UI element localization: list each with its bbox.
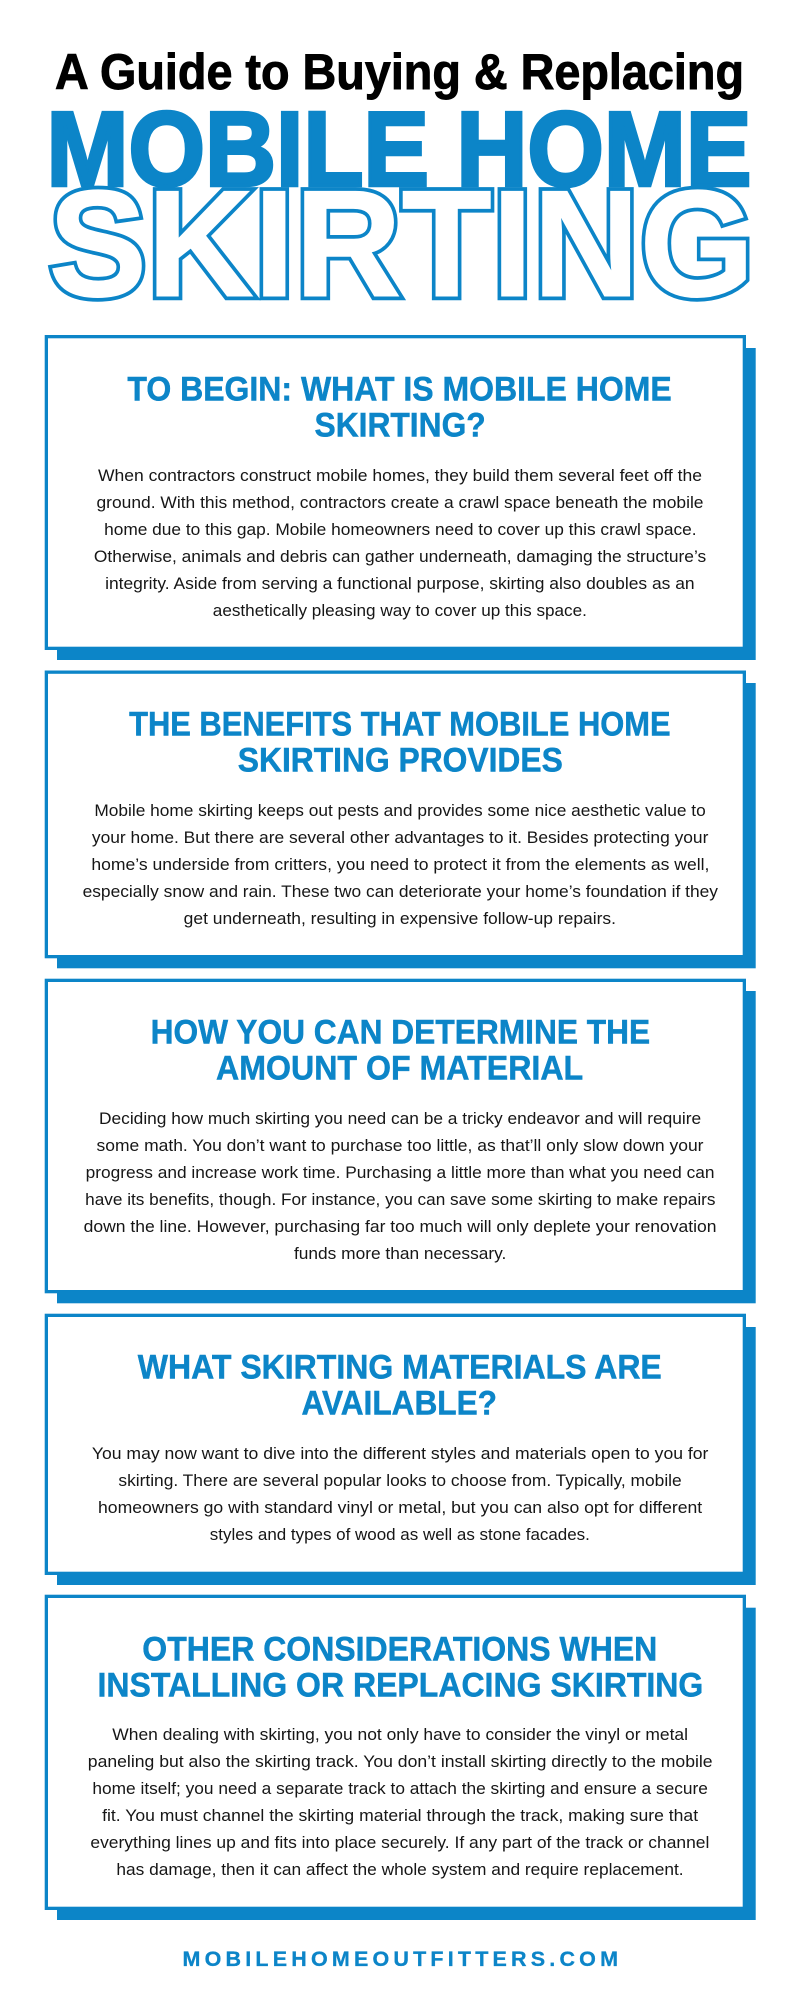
body text: You may now want to dive into the different styles and materials open to you for [92,1444,709,1463]
body text: home due to this gap. Mobile homeowners need to cover up this crawl space. [104,520,697,539]
heading [129,705,671,779]
body text: home itself; you need a separate track to attach the skirting and ensure a secure [92,1779,708,1798]
panel: available skirting materials [46,1315,756,1585]
body text [83,801,719,928]
heading: TO BEGIN: WHAT IS MOBILE HOME [127,370,672,408]
panel: other considerations [46,1596,756,1920]
panel: what is mobile home skirting [46,337,756,660]
body text: When contractors construct mobile homes, they build them several feet off the [98,466,702,485]
body text: integrity. Aside from serving a functional purpose, skirting also doubles as an [105,574,695,593]
body text: paneling but also the skirting track. You don’t install skirting directly to the mobile [88,1752,713,1771]
body text: home’s underside from critters, you need to protect it from the elements as well, [91,855,709,874]
body text: homeowners go with standard vinyl or metal, but you can also opt for different [98,1498,703,1517]
heading: INSTALLING OR REPLACING SKIRTING [98,1666,703,1704]
heading: AMOUNT OF MATERIAL [216,1049,583,1087]
body text: have its benefits, though. For instance, you can save some skirting to make repairs [85,1190,715,1209]
footer url: MOBILEHOMEOUTFITTERS.COM [182,1947,618,1971]
title line: Skirting outlined: SKIRTING [48,159,754,329]
body text: progress and increase work time. Purchasing a little more than what you need can [86,1163,715,1182]
body text: Deciding how much skirting you need can be a tricky endeavor and will require [99,1109,701,1128]
title line: A Guide to Buying & Replacing: A Guide to Buying & Replacing [55,44,744,100]
body text: Otherwise, animals and debris can gather underneath, damaging the structure’s [94,547,706,566]
panel: benefits of skirting [46,672,756,968]
body text [88,1725,713,1879]
body text: everything lines up and fits into place securely. If any part of the track or channel [90,1833,709,1852]
panel: determine amount of material [46,980,756,1303]
body text: has damage, then it can affect the whole system and require replacement. [116,1860,684,1879]
heading: OTHER CONSIDERATIONS WHEN [142,1630,657,1668]
body text: aesthetically pleasing way to cover up this space. [213,601,587,620]
title line: Mobile Home: MOBILE HOME [46,90,752,208]
body text [94,466,706,620]
body text: ground. With this method, contractors create a crawl space beneath the mobile [96,493,704,512]
heading: THE BENEFITS THAT MOBILE HOME [129,705,671,743]
heading: HOW YOU CAN DETERMINE THE [151,1013,650,1051]
heading: WHAT SKIRTING MATERIALS ARE [138,1349,662,1387]
heading [127,370,672,444]
body text: down the line. However, purchasing far too much will only deplete your renovation [84,1217,717,1236]
body text [92,1444,709,1544]
body text: especially snow and rain. These two can deteriorate your home’s foundation if they [83,882,719,901]
heading [98,1630,703,1704]
body text: get underneath, resulting in expensive follow-up repairs. [184,909,616,928]
body text [84,1109,717,1263]
body text: fit. You must channel the skirting material through the track, making sure that [102,1806,698,1825]
body text: styles and types of wood as well as stone facades. [210,1525,590,1544]
heading: SKIRTING PROVIDES [238,741,563,779]
body text: some math. You don’t want to purchase too little, as that’ll only slow down your [96,1136,704,1155]
body text: skirting. There are several popular looks to choose from. Typically, mobile [118,1471,682,1490]
body text: funds more than necessary. [294,1244,506,1263]
body text: When dealing with skirting, you not only have to consider the vinyl or metal [112,1725,688,1744]
title line: Skirting outlined: SKIRTING [48,159,754,329]
heading [138,1349,662,1423]
heading: AVAILABLE? [302,1385,497,1423]
heading [151,1013,650,1087]
body text: your home. But there are several other advantages to it. Besides protecting your [92,828,709,847]
body text: Mobile home skirting keeps out pests and provides some nice aesthetic value to [94,801,706,820]
header [46,44,754,329]
heading: SKIRTING? [314,406,486,444]
